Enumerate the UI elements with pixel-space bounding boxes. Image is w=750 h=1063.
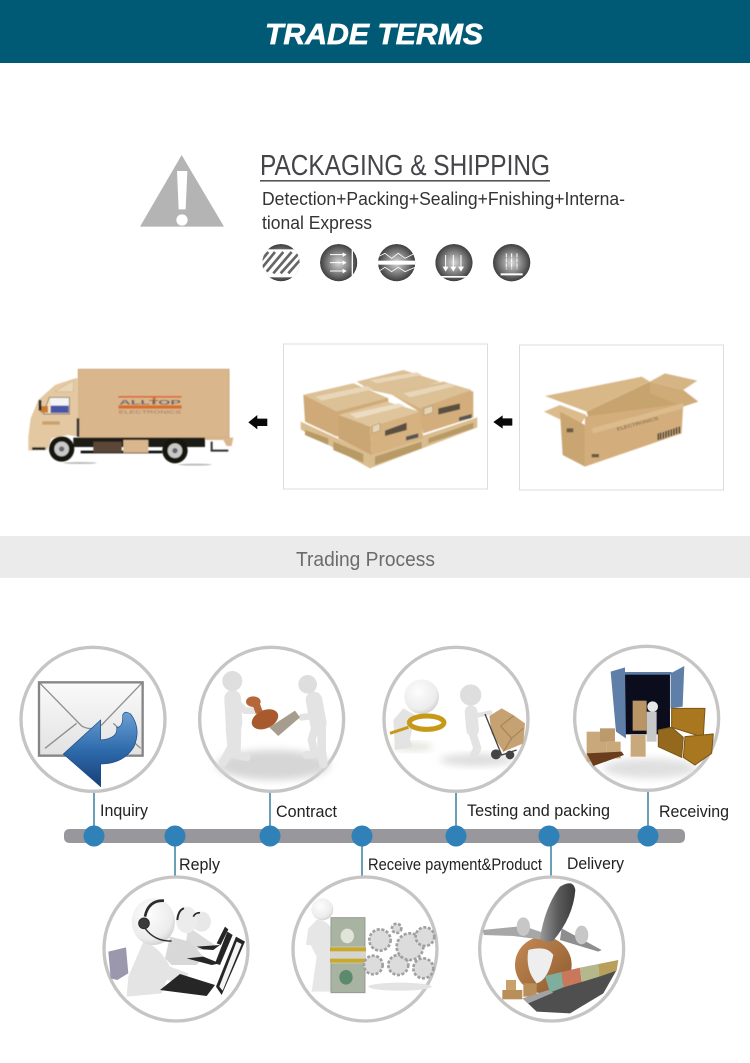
step: testing and packing	[384, 647, 610, 820]
icon: wave layers	[378, 244, 415, 281]
step: receiving	[575, 646, 729, 821]
cab window	[43, 397, 69, 414]
timeline bar	[64, 829, 685, 843]
arrow: truck from pallet	[248, 415, 267, 429]
step: delivery: Delivery	[567, 854, 624, 873]
connector lines	[94, 791, 648, 877]
truck	[28, 369, 233, 466]
band: trading process	[0, 536, 750, 578]
icon: magnifier	[390, 716, 444, 733]
wheels	[49, 436, 188, 463]
figure: mover	[465, 690, 490, 755]
icon: warning triangle	[140, 155, 224, 227]
icon: envelope	[39, 682, 143, 756]
icon: downward arrows	[435, 244, 473, 281]
timeline dots	[84, 826, 658, 846]
step: contract: Contract	[276, 802, 337, 821]
icon: money stack	[330, 918, 366, 993]
icon: globe	[515, 937, 572, 993]
figure: inspector	[393, 679, 439, 750]
cargo box	[78, 369, 229, 438]
icon: reply arrow	[63, 712, 137, 787]
logo: alltop electronics: ALLTOP	[119, 399, 181, 406]
icon: vertical stack	[493, 244, 530, 281]
icon: parcels	[502, 980, 537, 999]
laptops	[160, 927, 245, 996]
wooden crates	[658, 708, 713, 765]
text block: packaging steps: tional Express	[262, 212, 372, 233]
chassis	[73, 438, 205, 447]
icon: arrows to wall	[320, 243, 357, 282]
icons: handling symbols	[262, 243, 530, 282]
panel: open carton	[520, 345, 724, 490]
header banner	[0, 0, 750, 63]
step: testing and packing: Testing and packing	[467, 801, 610, 820]
monitor	[108, 947, 128, 980]
step: inquiry: Inquiry	[100, 801, 148, 820]
title: TRADE TERMS	[265, 19, 484, 51]
step: receive payment and product: Receive payment&Product	[368, 856, 542, 874]
icon: container ship	[523, 960, 618, 1013]
timeline	[64, 791, 685, 877]
icon: stamp	[246, 696, 300, 736]
container	[611, 666, 684, 738]
arrow: pallet from carton	[493, 415, 512, 429]
figure: left person	[223, 676, 258, 763]
barcode	[658, 427, 679, 440]
carton label: ELECTRONICS	[616, 416, 659, 432]
icon: gears	[364, 924, 434, 978]
figure: right person	[302, 680, 323, 764]
headset	[139, 901, 200, 941]
step: receiving: Receiving	[659, 802, 729, 821]
carton interior	[587, 382, 683, 428]
icon: airplane	[483, 883, 602, 952]
step: reply	[104, 855, 248, 1021]
cartons	[303, 370, 473, 455]
cab	[28, 378, 78, 451]
step: inquiry	[21, 647, 165, 820]
band: trading process: Trading Process	[296, 549, 435, 571]
step: delivery	[480, 854, 624, 1021]
figure: person	[306, 898, 333, 992]
step: contract	[200, 647, 344, 821]
cartons on pallet	[587, 728, 624, 766]
figures: call agents	[127, 898, 215, 997]
icon: hatched layer	[262, 244, 302, 281]
text block: packaging steps	[262, 188, 625, 233]
logo: alltop electronics: ELECTRONICS	[119, 410, 181, 415]
heading: packaging and shipping: PACKAGING & SHIPPING	[260, 150, 550, 182]
figure: worker with boxes	[631, 701, 658, 757]
pallet	[301, 417, 477, 468]
step: reply: Reply	[179, 855, 220, 874]
panel: pallet of cartons	[284, 344, 488, 489]
text block: packaging steps: Detection+Packing+Sealing+Fnishing+Interna-	[262, 188, 625, 209]
logo: alltop electronics	[118, 396, 182, 415]
icon: hand truck with cartons	[485, 708, 525, 759]
step: receive payment and product	[293, 856, 542, 1021]
